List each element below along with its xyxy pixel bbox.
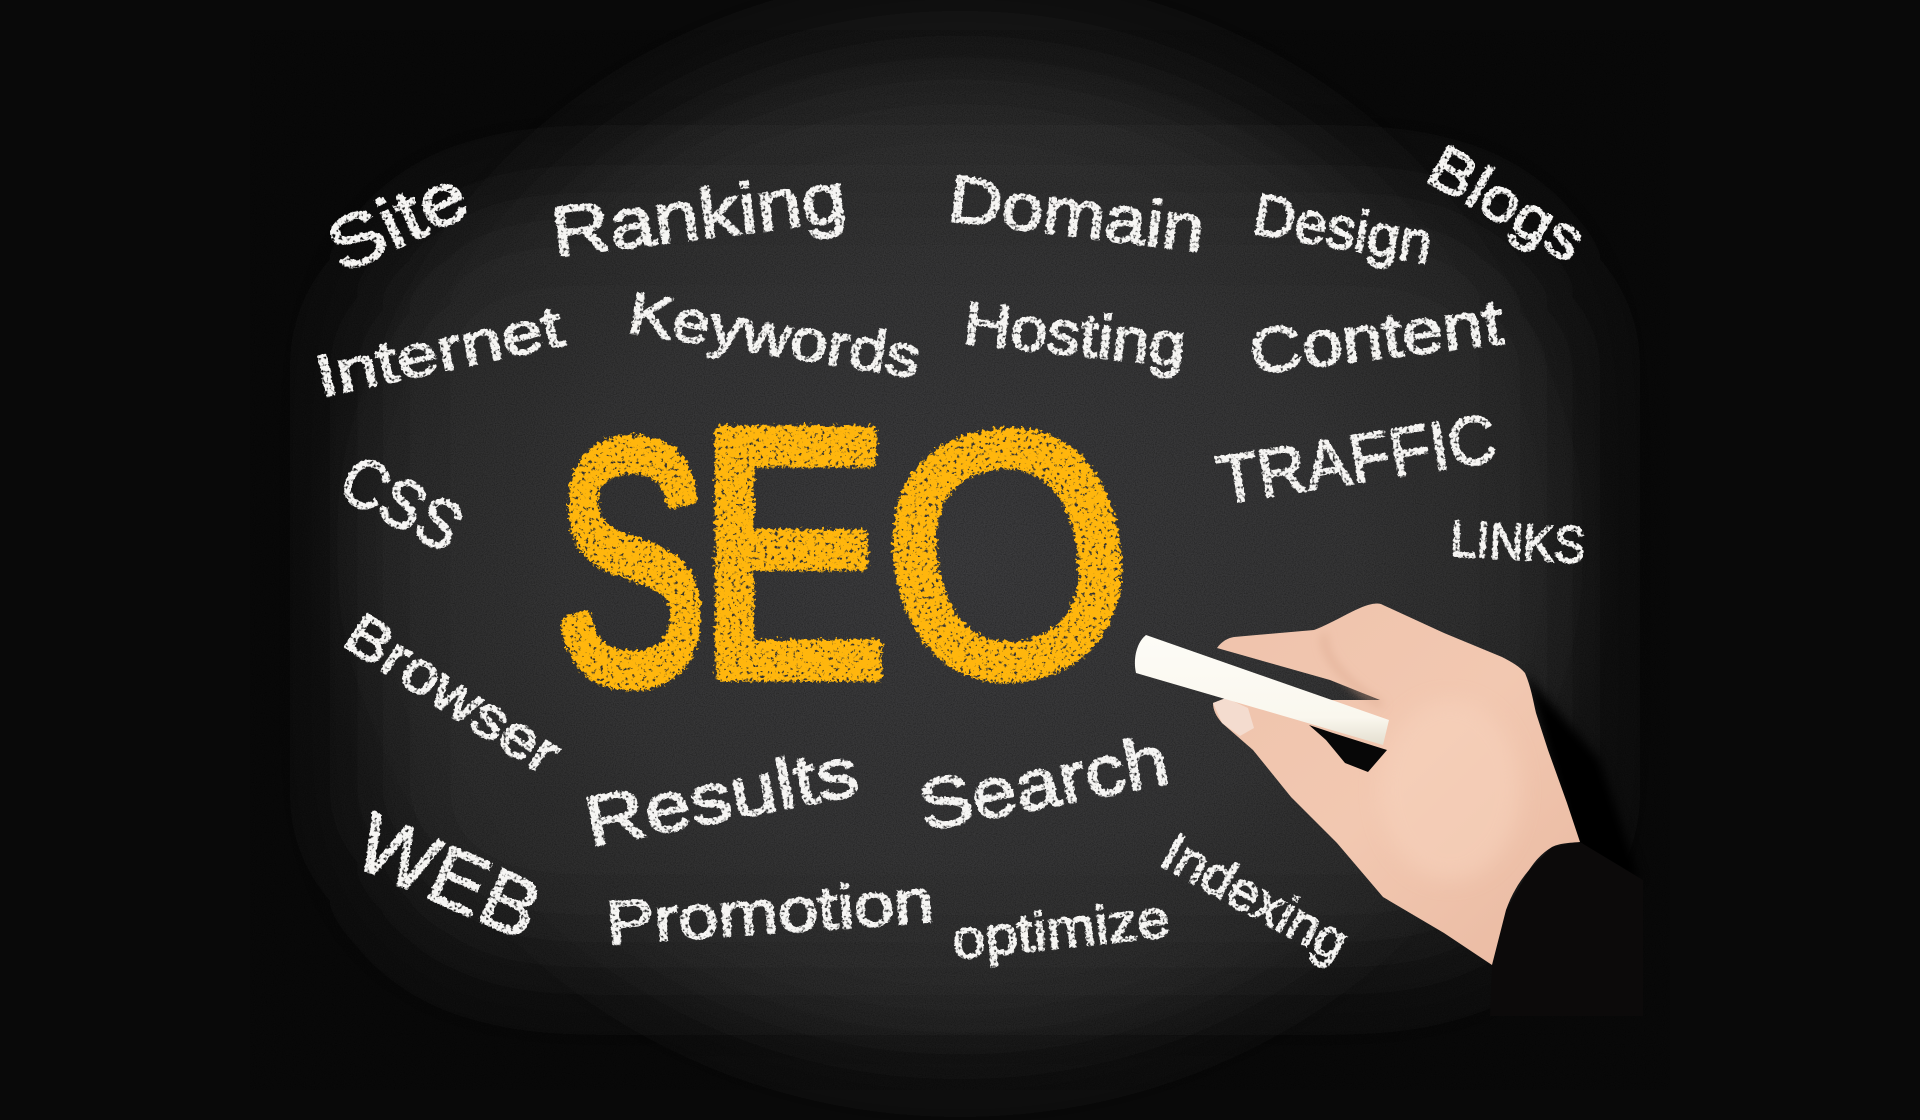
word: optimize: optimize bbox=[949, 889, 1173, 971]
thumb nail bbox=[1213, 698, 1254, 736]
knuckle crease bbox=[1324, 634, 1382, 705]
hand shadow bbox=[1525, 673, 1640, 880]
word: Browser: Browser bbox=[333, 601, 572, 787]
hand holding chalk bbox=[1135, 604, 1643, 1016]
board glow: main rectangle bbox=[370, 205, 1560, 955]
stick of chalk bbox=[1135, 635, 1389, 745]
board centre bbox=[290, 50, 1630, 1070]
word: Results: Results bbox=[578, 732, 865, 863]
board glow: vertical ellipse bbox=[420, 55, 1500, 1035]
word: Blogs: Blogs bbox=[1417, 132, 1597, 275]
board grain bbox=[250, 30, 1670, 1090]
word: TRAFFIC: TRAFFIC bbox=[1212, 399, 1502, 519]
word: Hosting: Hosting bbox=[960, 289, 1189, 380]
word: Design: Design bbox=[1249, 182, 1437, 277]
word: Indexing: Indexing bbox=[1152, 822, 1359, 973]
word: Keywords: Keywords bbox=[624, 281, 925, 391]
palm highlight bbox=[1380, 700, 1520, 880]
SEO heading bbox=[556, 348, 1159, 762]
letter S: S bbox=[556, 373, 706, 753]
letter O: O bbox=[855, 348, 1159, 762]
word: Promotion: Promotion bbox=[604, 867, 936, 957]
word: LINKS: LINKS bbox=[1449, 509, 1587, 574]
word: Domain: Domain bbox=[944, 162, 1209, 267]
word: CSS: CSS bbox=[328, 440, 475, 567]
gap between fingers bbox=[1309, 725, 1387, 772]
hand bbox=[1213, 604, 1580, 965]
word: Search: Search bbox=[912, 721, 1175, 847]
word: Internet: Internet bbox=[310, 294, 569, 410]
letter E: E bbox=[698, 358, 888, 749]
chalk word cloud bbox=[310, 132, 1597, 973]
word: WEB: WEB bbox=[343, 795, 555, 958]
word: Ranking: Ranking bbox=[547, 158, 851, 273]
word: Content: Content bbox=[1245, 287, 1507, 388]
jacket sleeve bbox=[1490, 842, 1643, 1016]
word: Site: Site bbox=[314, 152, 480, 289]
